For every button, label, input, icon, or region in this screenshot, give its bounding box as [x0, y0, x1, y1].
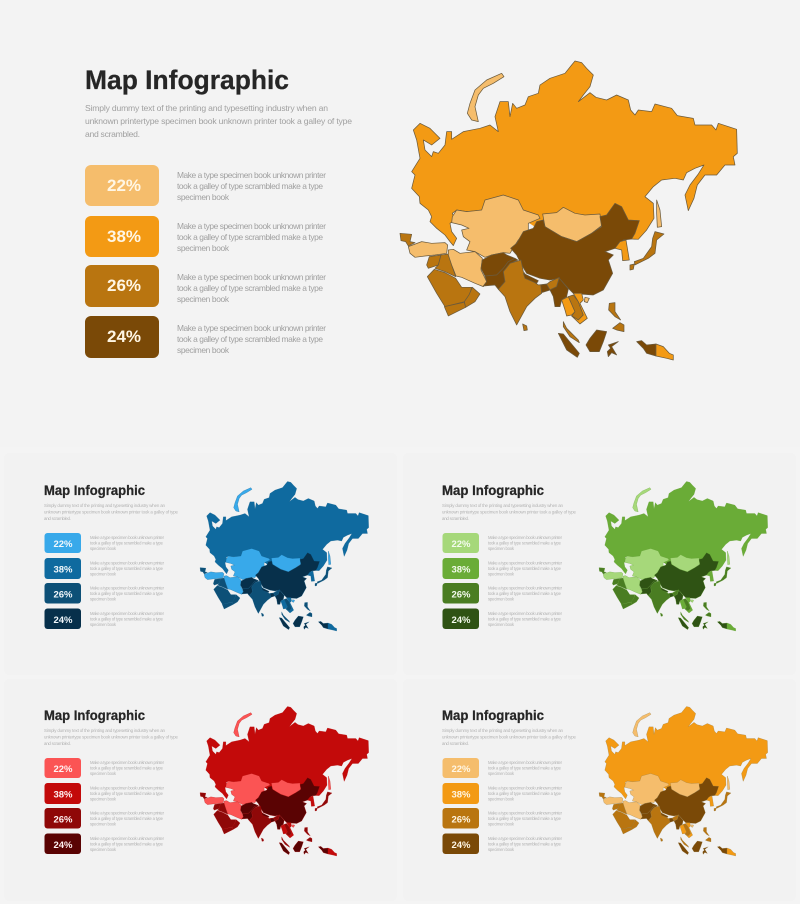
intro text: and scrambled.	[442, 516, 469, 521]
intro text: and scrambled.	[44, 741, 71, 746]
stat text 2: specimen book	[90, 796, 117, 802]
stat box: 26%	[442, 808, 479, 828]
stat text 4: specimen book	[90, 847, 117, 852]
stat box: 24%: 24%	[53, 840, 73, 851]
intro text: Simply dummy text of the printing and typesetting industry when an	[85, 103, 328, 113]
stat text 3	[90, 810, 165, 826]
stat box: 38%: 38%	[107, 227, 141, 246]
stat text 1: specimen book	[488, 771, 515, 776]
stat text 4: took a galley of type scrambled make a type	[90, 616, 164, 622]
stat text 3: specimen book	[177, 294, 230, 304]
stat text 4: took a galley of type scrambled make a type	[488, 842, 562, 846]
stat text 3: took a galley of type scrambled make a type	[488, 816, 562, 821]
stat text 2: specimen book	[488, 796, 515, 802]
stat text 3: took a galley of type scrambled make a type	[90, 591, 164, 596]
stat box: 26%: 26%	[53, 814, 73, 826]
stat box: 26%: 26%	[451, 814, 471, 826]
stat text 1: specimen book	[177, 192, 230, 202]
stat text 1	[90, 535, 165, 551]
stat box: 22%: 22%	[53, 539, 73, 550]
stat box: 24%	[442, 608, 479, 629]
stat box: 38%	[442, 558, 479, 579]
stat text 2: took a galley of type scrambled make a type	[90, 566, 164, 571]
stat box: 38%	[44, 558, 81, 579]
stat box: 24%: 24%	[53, 615, 73, 626]
stat text 1	[488, 760, 563, 776]
intro text: Simply dummy text of the printing and typesetting industry when an	[44, 728, 166, 733]
stat text 4: took a galley of type scrambled make a type	[90, 842, 164, 846]
stat text 1: specimen book	[90, 771, 117, 776]
stat text 2: Make a type specimen book unknown printer	[90, 786, 165, 790]
panel: blue slide	[4, 453, 397, 675]
stat box: 38%: 38%	[451, 790, 471, 800]
stat box: 24%: 24%	[451, 615, 471, 626]
stat text 2	[488, 786, 563, 802]
panel: red slide	[4, 679, 397, 901]
stat text 1: took a galley of type scrambled make a type	[90, 540, 164, 546]
stat box: 22%	[442, 533, 479, 553]
title: Map Infographic	[44, 483, 145, 498]
stat box: 24%	[44, 608, 81, 629]
stat text 2	[177, 221, 326, 253]
stat text 3: took a galley of type scrambled make a type	[488, 591, 562, 596]
stat box: 24%: 24%	[451, 840, 471, 851]
stat text 4: specimen book	[90, 622, 117, 627]
stat text 1	[488, 535, 563, 551]
stat box: 22%: 22%	[451, 764, 471, 775]
stat text 4	[90, 611, 165, 627]
stat text 2: took a galley of type scrambled make a type	[177, 232, 323, 242]
stat text 1: specimen book	[488, 546, 515, 551]
stat box: 24%: 24%	[107, 327, 141, 346]
stat box: 22%: 22%	[53, 764, 73, 775]
stat text 3: specimen book	[90, 596, 117, 602]
title: Map Infographic	[442, 708, 544, 723]
stat text 4: Make a type specimen book unknown printer	[177, 323, 326, 333]
stat text 1	[177, 170, 326, 202]
stat text 3: specimen book	[90, 822, 117, 826]
intro text: unknown printertype specimen book unknown printer took a galley of type	[442, 510, 577, 514]
stat text 4: Make a type specimen book unknown printer	[488, 836, 563, 841]
intro text: Simply dummy text of the printing and typesetting industry when an	[442, 728, 564, 733]
intro text: and scrambled.	[85, 129, 140, 139]
title: Map Infographic	[442, 483, 544, 498]
intro text	[44, 503, 179, 521]
stat text 2: specimen book	[90, 572, 117, 576]
title: Map Infographic	[85, 65, 289, 95]
stat text 3: Make a type specimen book unknown printer	[90, 810, 165, 816]
stat box: 26%	[44, 808, 81, 828]
stat text 3: took a galley of type scrambled make a type	[177, 283, 323, 293]
intro text	[85, 103, 352, 139]
stat text 4: Make a type specimen book unknown printer	[90, 836, 165, 841]
stat box: 26%	[85, 265, 159, 307]
stat box: 38%	[442, 783, 479, 804]
stat box: 38%	[44, 783, 81, 804]
stat text 4	[177, 323, 326, 355]
stat box: 26%: 26%	[53, 590, 73, 600]
stat box: 38%	[85, 216, 159, 257]
stat box: 26%: 26%	[451, 590, 471, 600]
stat box: 22%	[44, 758, 81, 778]
stat text 4: took a galley of type scrambled make a type	[177, 334, 323, 344]
panel: small amber slide	[403, 679, 796, 901]
stat text 2: specimen book	[488, 572, 515, 576]
map: Asia amber	[400, 61, 737, 360]
stat text 3: Make a type specimen book unknown printer	[488, 810, 563, 816]
stat box: 26%	[44, 583, 81, 604]
stat text 1	[90, 760, 165, 776]
stat box: 26%: 26%	[107, 276, 141, 295]
stat text 4: specimen book	[488, 847, 515, 852]
stat text 1: Make a type specimen book unknown printer	[488, 535, 563, 540]
intro text: unknown printertype specimen book unknown printer took a galley of type	[85, 116, 352, 126]
intro text	[44, 728, 179, 746]
intro text: and scrambled.	[44, 516, 71, 521]
stat box: 24%	[85, 316, 159, 358]
stat text 3: specimen book	[488, 596, 515, 602]
stat text 4: took a galley of type scrambled make a type	[488, 616, 562, 622]
intro text: unknown printertype specimen book unknown printer took a galley of type	[44, 510, 179, 514]
intro text	[442, 503, 577, 521]
map: Asia red	[200, 707, 369, 856]
map: Asia green	[599, 482, 768, 631]
stat text 1: took a galley of type scrambled make a type	[488, 766, 562, 770]
stat box: 22%	[442, 758, 479, 778]
stat text 1: Make a type specimen book unknown printer	[90, 535, 165, 540]
intro text: unknown printertype specimen book unknown printer took a galley of type	[44, 734, 179, 740]
stat text 1: took a galley of type scrambled make a type	[177, 181, 323, 191]
stat text 3	[90, 586, 165, 602]
stat text 2: Make a type specimen book unknown printer	[177, 221, 326, 231]
stat text 4	[488, 836, 563, 852]
stat text 3	[488, 586, 563, 602]
stat box: 38%: 38%	[53, 790, 73, 800]
stat text 2	[90, 560, 165, 576]
panel: main amber slide	[0, 0, 800, 447]
stat text 2: Make a type specimen book unknown printer	[90, 560, 165, 566]
stat text 2: took a galley of type scrambled make a type	[90, 791, 164, 796]
stat box: 22%	[85, 165, 159, 206]
stat box: 22%: 22%	[107, 176, 141, 195]
stat text 3: Make a type specimen book unknown printer	[90, 586, 165, 590]
intro text: unknown printertype specimen book unknown printer took a galley of type	[442, 734, 577, 740]
stat text 4: Make a type specimen book unknown printer	[488, 611, 563, 616]
stat text 4: specimen book	[177, 345, 230, 355]
stat text 1: Make a type specimen book unknown printer	[90, 760, 165, 765]
intro text: and scrambled.	[442, 741, 469, 746]
stat box: 38%: 38%	[451, 564, 471, 576]
stat text 4: Make a type specimen book unknown printer	[90, 611, 165, 616]
stat text 3: specimen book	[488, 822, 515, 826]
stat text 1: took a galley of type scrambled make a type	[90, 766, 164, 770]
intro text: Simply dummy text of the printing and typesetting industry when an	[442, 503, 564, 508]
stat text 4	[488, 611, 563, 627]
stat text 3: Make a type specimen book unknown printer	[177, 272, 326, 282]
stat box: 22%: 22%	[451, 539, 471, 550]
stat text 1: took a galley of type scrambled make a type	[488, 540, 562, 546]
stat text 2: Make a type specimen book unknown printer	[488, 560, 563, 566]
panel: green slide	[403, 453, 796, 675]
stat text 2	[488, 560, 563, 576]
stat text 4	[90, 836, 165, 852]
stat text 2: took a galley of type scrambled make a type	[488, 791, 562, 796]
stat box: 38%: 38%	[53, 564, 73, 576]
stat text 3: Make a type specimen book unknown printer	[488, 586, 563, 590]
stat text 1: Make a type specimen book unknown printer	[177, 170, 326, 180]
stat text 3	[177, 272, 326, 304]
intro text: Simply dummy text of the printing and typesetting industry when an	[44, 503, 166, 508]
stat text 3: took a galley of type scrambled make a type	[90, 816, 164, 821]
title: Map Infographic	[44, 708, 145, 723]
stat box: 24%	[44, 834, 81, 854]
stat text 2: Make a type specimen book unknown printer	[488, 786, 563, 790]
stat text 1: Make a type specimen book unknown printer	[488, 760, 563, 765]
map: Asia blue	[200, 482, 369, 631]
stat text 3	[488, 810, 563, 826]
stat box: 24%	[442, 834, 479, 854]
map: Asia small amber	[599, 707, 768, 856]
intro text	[442, 728, 577, 746]
stat text 4: specimen book	[488, 622, 515, 627]
stat text 2: specimen book	[177, 243, 230, 253]
stat box: 22%	[44, 533, 81, 553]
stat box: 26%	[442, 583, 479, 604]
stat text 2: took a galley of type scrambled make a type	[488, 566, 562, 571]
stat text 1: specimen book	[90, 546, 117, 551]
stat text 2	[90, 786, 165, 802]
